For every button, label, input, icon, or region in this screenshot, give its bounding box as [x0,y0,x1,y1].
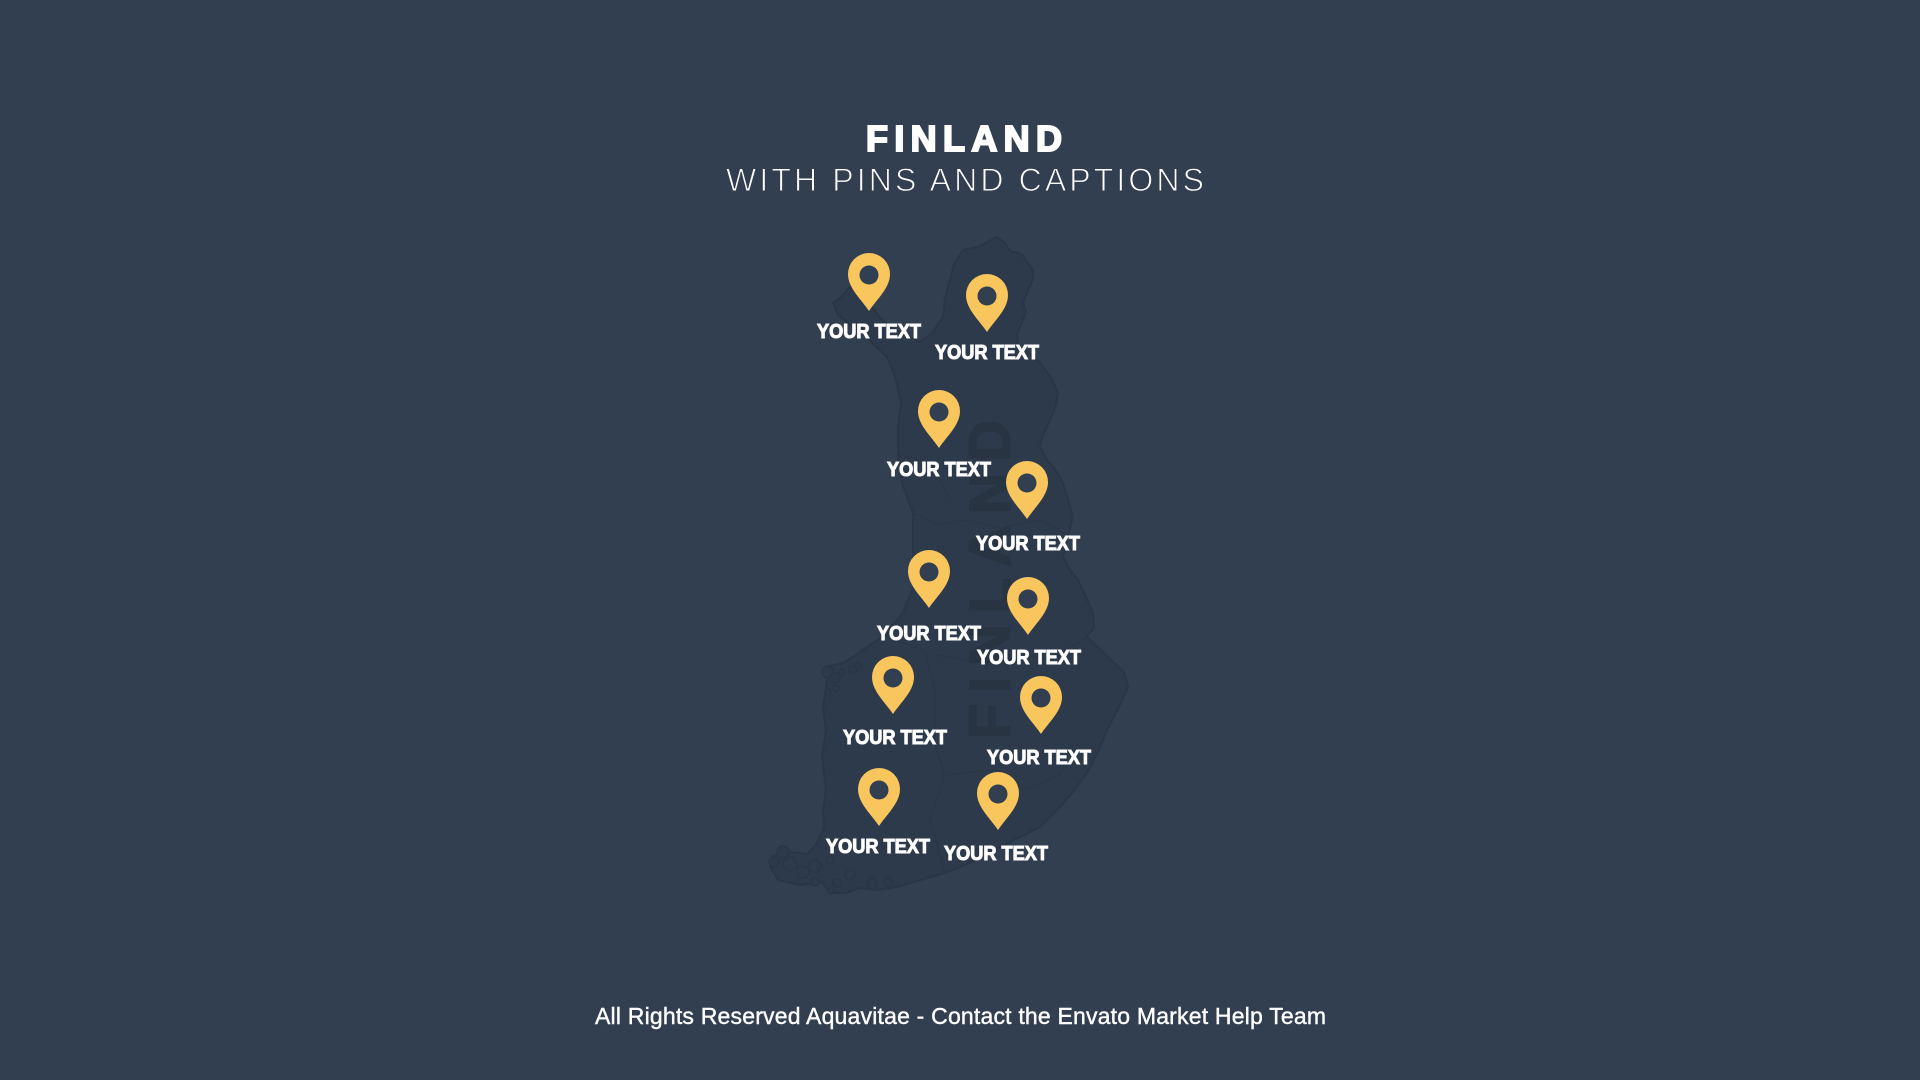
map silhouette [770,237,1128,893]
pin icon [966,274,1008,332]
pin 7 with caption [843,656,947,749]
archipelago [769,663,892,894]
pin 3 with caption [887,390,991,481]
title: FINLAND [866,118,1062,159]
caption: YOUR TEXT [826,836,930,858]
caption: YOUR TEXT [944,843,1048,865]
pin icon [1006,461,1048,519]
footer credit: All Rights Reserved Aquavitae - Contact the Envato Market Help Team [595,1003,1326,1029]
pin icon [872,656,914,714]
pin 2 with caption [935,274,1039,364]
pin icon [1007,577,1049,635]
pin icon [848,253,890,311]
caption: YOUR TEXT [817,321,921,343]
caption: YOUR TEXT [977,647,1081,669]
pin icon [1020,676,1062,734]
pin 6 with caption [977,577,1081,669]
caption: YOUR TEXT [843,727,947,749]
pin 5 with caption [877,550,981,645]
subtitle: WITH PINS AND CAPTIONS [726,162,1204,198]
caption: YOUR TEXT [935,342,1039,364]
caption: YOUR TEXT [987,747,1091,769]
pin 10 with caption [944,772,1048,865]
map of Finland [769,237,1128,894]
ghost label: FINLAND: FINLAND [958,420,1023,739]
region borders [893,455,1087,873]
pin icon [977,772,1019,830]
caption: YOUR TEXT [976,533,1080,555]
pin 8 with caption [987,676,1091,769]
pin icon [908,550,950,608]
pin icon [918,390,960,448]
pin 1 with caption [817,253,921,343]
caption: YOUR TEXT [877,623,981,645]
pin icon [858,768,900,826]
caption: YOUR TEXT [887,459,991,481]
pin 9 with caption [826,768,930,858]
pin 4 with caption [976,461,1080,555]
